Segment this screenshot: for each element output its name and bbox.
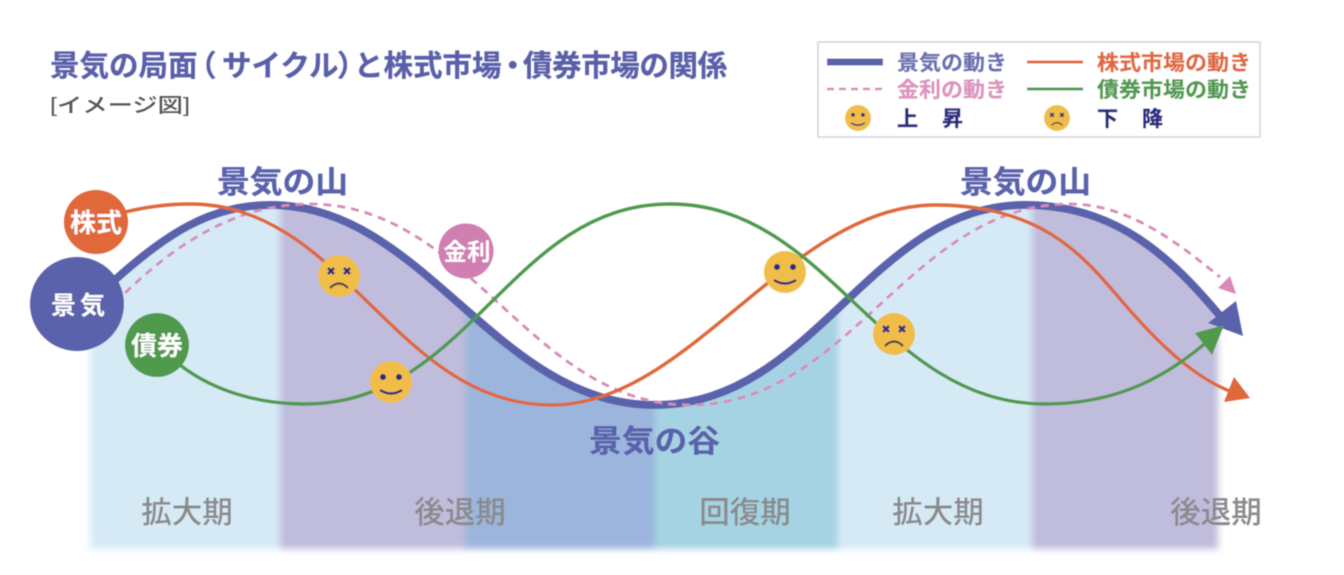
legend: fall: 下: [1097, 108, 1118, 131]
badge: economy: 景気: [51, 292, 109, 320]
face: stock rising: [764, 251, 806, 293]
legend: fall: 降: [1142, 108, 1163, 131]
phase label: recession 1: 後退期: [414, 496, 506, 530]
title: （: [187, 50, 217, 83]
legend: fall: [1044, 105, 1163, 131]
title: 景気の局面: [50, 50, 198, 83]
title: と株式市場: [354, 50, 502, 83]
stock curve: [125, 204, 1250, 405]
badge: interest rate: 金利: [444, 239, 490, 265]
title: 債券市場の関係: [523, 50, 728, 83]
face: bond falling: [873, 313, 915, 355]
legend: rise: 上: [897, 108, 918, 131]
phase bands: [90, 180, 1218, 549]
peak label left: 景気の山: [217, 165, 348, 200]
face: stock falling: [318, 255, 360, 297]
badge: bonds: 債券: [131, 331, 183, 361]
badge: stock: [64, 190, 128, 254]
legend: bond line: 債券市場の動き: [1097, 79, 1251, 102]
badge: economy: [30, 257, 124, 351]
legend: interest rate line: 金利の動き: [897, 79, 1007, 102]
phase label: recovery: 回復期: [699, 496, 791, 530]
phase label: expansion 2: 拡大期: [892, 496, 984, 530]
subtitle: [イメージ図]: [50, 95, 190, 117]
title: ）: [337, 50, 367, 83]
title: ・: [498, 50, 528, 83]
interest rate curve: [125, 204, 1236, 405]
badge: interest rate: [438, 224, 494, 278]
face: bond rising: [370, 361, 412, 403]
title: サイクル: [222, 50, 339, 83]
trough label: 景気の谷: [589, 424, 720, 459]
peak label right: 景気の山: [960, 165, 1091, 200]
badge: stock: 株式: [70, 208, 122, 238]
bond curve: [180, 204, 1224, 404]
legend: economy line: 景気の動き: [897, 52, 1007, 75]
legend: [818, 42, 1260, 137]
legend: rise: [845, 105, 963, 131]
phase label: recession 2: 後退期: [1170, 496, 1262, 530]
legend: stock line: 株式市場の動き: [1097, 52, 1251, 75]
legend: rise: 昇: [942, 108, 963, 131]
badge: bonds: [125, 313, 189, 377]
economy curve: [115, 205, 1243, 405]
phase label: expansion 1: 拡大期: [141, 496, 233, 530]
